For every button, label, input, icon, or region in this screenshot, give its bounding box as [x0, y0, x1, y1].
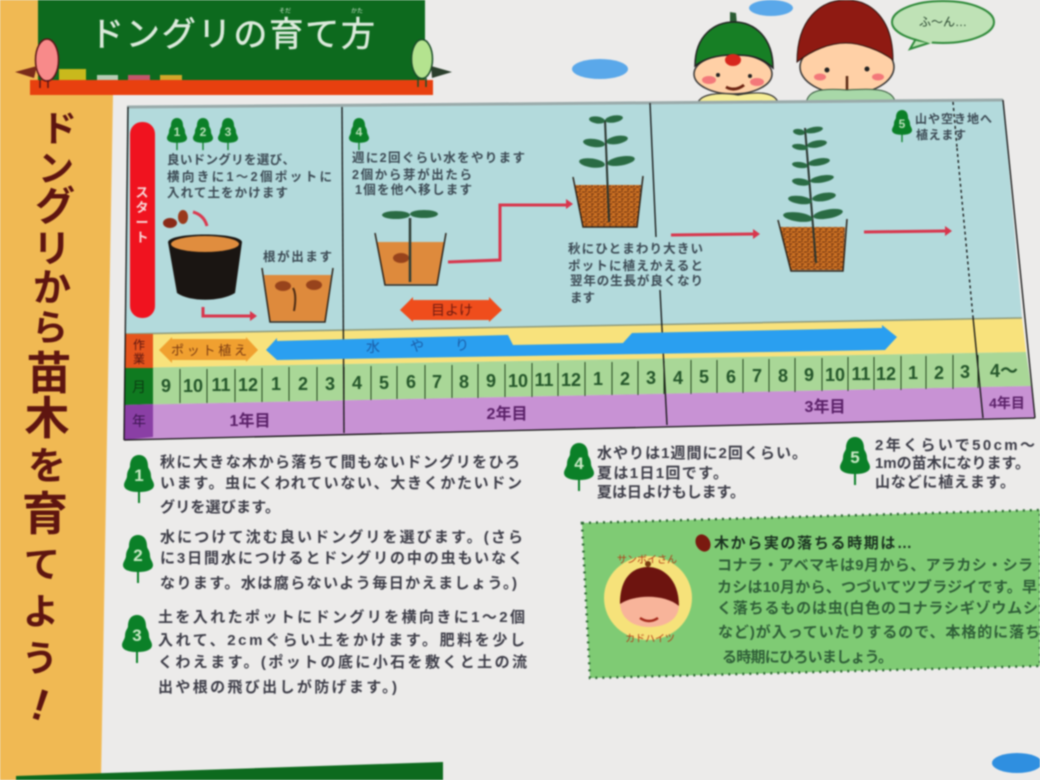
- year labels: 4年目: [989, 395, 1025, 411]
- explanation 5: 1mの苗木になります。: [875, 454, 1030, 472]
- explanation 4: [564, 443, 807, 501]
- vertical title: を: [28, 446, 66, 488]
- note text: カシは10月から、つづいてツブラジイです。早: [717, 578, 1037, 596]
- month numbers: 1: [593, 369, 603, 389]
- explanation 2: [123, 528, 523, 592]
- black pot: [168, 234, 242, 300]
- speech bubble: [892, 1, 994, 49]
- vertical title: リ: [33, 229, 71, 271]
- bullet acorn: [692, 532, 714, 554]
- vertical title: 苗: [26, 348, 72, 399]
- vertical title: ン: [38, 148, 74, 189]
- shade arrow: 目よけ: [431, 302, 473, 318]
- year labels: [230, 395, 1025, 430]
- explanation 1: 秋に大きな木から落ちて間もないドングリをひろ: [160, 453, 520, 471]
- month row: [125, 352, 1031, 405]
- month numbers: 11: [851, 364, 871, 384]
- pot planting arrow: ポット植え: [171, 343, 247, 358]
- month numbers: 2: [934, 363, 944, 383]
- year row: [124, 386, 1035, 440]
- month numbers: 1: [908, 363, 918, 383]
- month numbers: 8: [459, 372, 469, 392]
- work row: [125, 318, 1026, 368]
- pink bird: [15, 39, 58, 88]
- row label cells: 業: [133, 352, 145, 366]
- vertical title: て: [24, 544, 60, 585]
- green bird: [412, 40, 452, 87]
- explanation 5: 山などに植えます。: [875, 473, 1015, 491]
- step trees 1 2 3: 3: [225, 125, 232, 139]
- watering arrow: り: [455, 337, 469, 353]
- step 4 text: [352, 150, 525, 197]
- month numbers: 6: [406, 372, 416, 392]
- schedule chart panel: [124, 100, 1035, 440]
- step 1-3 text: 入れて土をかけます: [167, 185, 288, 200]
- month numbers: 3: [960, 362, 970, 382]
- explanation 2: なります。水は腐らないよう毎日かえましょう。): [160, 574, 517, 592]
- explanation 1: グリを選びます。: [160, 498, 280, 516]
- header blackboard: [15, 0, 452, 95]
- step tree 4: [349, 118, 369, 150]
- month numbers: 2: [298, 374, 308, 394]
- step trees 1 2 3: [167, 118, 238, 150]
- note text: [717, 557, 1040, 666]
- note heading: 木から実の落ちる時期は…: [714, 535, 912, 552]
- month numbers: 5: [379, 373, 389, 393]
- month numbers: 4〜: [990, 361, 1018, 381]
- start bar: ト: [135, 230, 149, 245]
- explanation 2: 水につけて沈む良いドングリを選びます。(さら: [160, 528, 523, 546]
- step 4 text: 1個を他へ移します: [355, 182, 472, 197]
- large tree pot: [778, 125, 847, 271]
- start bar: タ: [135, 200, 149, 215]
- left orange band: [0, 0, 113, 780]
- chalks: [59, 69, 182, 81]
- month numbers: 6: [726, 367, 736, 387]
- month numbers: 4: [352, 373, 362, 393]
- explanation 5: 2年くらいで50cm〜: [875, 436, 1035, 454]
- red acorn character: [797, 0, 896, 106]
- month numbers: 11: [211, 375, 231, 395]
- pot planting arrow: [159, 337, 258, 363]
- explanation 1: [124, 453, 522, 516]
- header title: ドングリの育て方: [90, 16, 375, 54]
- speech bubble: ふ〜ん…: [919, 15, 967, 29]
- note text: コナラ・アベマキは9月から、アラカシ・シラ: [717, 557, 1033, 574]
- step 4 text: 週に2回ぐらい水をやります: [352, 150, 525, 165]
- row label cells: 月: [132, 379, 146, 395]
- watering arrow: や: [410, 338, 424, 354]
- step 5 text: 山や空き地へ: [915, 111, 992, 126]
- month numbers: 2: [620, 369, 630, 389]
- month numbers: 12: [561, 370, 581, 390]
- pot with sprouting acorns: [262, 268, 333, 322]
- young tree pot: [573, 114, 643, 227]
- vertical title: ら: [32, 307, 68, 348]
- step 1-3 text: 良いドングリを選び、: [167, 152, 295, 167]
- year labels: 3年目: [805, 397, 845, 416]
- month numbers: 10: [183, 376, 203, 396]
- watering arrow: 水: [366, 339, 380, 355]
- chalk tray: [30, 80, 433, 95]
- acorns and curved arrow: [163, 210, 207, 228]
- clouds: [572, 0, 1040, 773]
- shade arrow: [400, 297, 502, 322]
- explanation 3: 入れて、2cmぐらい土をかけます。肥料を少し: [158, 631, 525, 649]
- explanation 4: 4: [574, 454, 584, 473]
- year labels: 1年目: [230, 411, 270, 430]
- row label cells: 年: [132, 413, 146, 429]
- vertical title: !: [26, 680, 55, 731]
- month numbers: 7: [432, 372, 442, 392]
- year divider lines: [124, 100, 1035, 440]
- month numbers: 7: [752, 366, 762, 386]
- watering arrow: [266, 325, 897, 360]
- month numbers: 12: [238, 375, 258, 395]
- arrow to pot 2: [203, 307, 250, 316]
- month numbers: [161, 361, 1018, 396]
- vertical title: 木: [24, 393, 70, 444]
- month numbers: 5: [699, 367, 709, 387]
- month numbers: 1: [271, 374, 281, 394]
- month numbers: 12: [876, 364, 896, 384]
- repot text: [568, 241, 703, 305]
- repot text: ポットに植えかえると: [568, 258, 703, 273]
- month separators: [180, 355, 978, 403]
- explanation 1: います。虫にくわれていない、大きくかたいドン: [160, 474, 522, 492]
- step 5 text: [915, 111, 992, 142]
- acorn mascot medallion: サンボイさん: [617, 554, 677, 566]
- elbow arrow: [448, 205, 566, 262]
- vertical title: う: [22, 638, 58, 679]
- explanation 5: [840, 436, 1035, 491]
- step tree 5: [892, 110, 912, 142]
- step trees 1 2 3: 1: [174, 125, 181, 139]
- seedling pot: [375, 210, 446, 285]
- explanation 4: 夏は日よけもします。: [597, 484, 745, 501]
- arrow to large pot: [671, 234, 753, 235]
- green acorn character: [694, 12, 779, 106]
- step 1-3 text: [167, 152, 332, 200]
- start bar: ス: [135, 185, 149, 200]
- vertical title: 育: [22, 488, 68, 540]
- month numbers: 3: [325, 374, 335, 394]
- step 5 text: 植えます: [916, 127, 966, 142]
- explanation 2: に3日間水につけるとドングリの中の虫もいなく: [160, 549, 523, 567]
- explanation 4: 水やりは1週間に2回くらい。: [597, 445, 807, 462]
- start bar: ー: [135, 215, 149, 230]
- explanation 4: 夏は1日1回です。: [597, 465, 728, 482]
- explanation 3: [122, 608, 527, 696]
- repot text: 秋にひとまわり大きい: [568, 241, 703, 256]
- month numbers: 4: [673, 368, 683, 388]
- month numbers: 8: [778, 366, 788, 386]
- step tree 5: 5: [899, 117, 906, 131]
- vertical title: か: [33, 268, 71, 310]
- acorn mascot medallion: [604, 554, 692, 645]
- step 1-3 text: 横向きに1〜2個ポットに: [167, 169, 332, 184]
- note text: る時期にひろいましょう。: [722, 649, 893, 666]
- vertical title: [22, 108, 77, 731]
- roots text: 根が出ます: [263, 249, 332, 264]
- arrow to planting site: [864, 231, 945, 232]
- month numbers: 10: [825, 365, 845, 385]
- explanation 2: 2: [133, 546, 143, 565]
- furigana: [279, 8, 363, 15]
- vertical title: グ: [35, 185, 75, 229]
- explanation 3: 3: [132, 626, 142, 645]
- explanation 3: 土を入れたポットにドングリを横向きに1〜2個: [158, 608, 525, 626]
- row label cells: 作: [133, 338, 145, 352]
- month numbers: 11: [534, 370, 554, 390]
- acorn mascot medallion: カドハイツ: [625, 633, 675, 645]
- repot text: ます: [570, 291, 595, 305]
- furigana: そだ: [279, 8, 291, 15]
- step tree 4: 4: [356, 125, 363, 139]
- note panel: [582, 510, 1040, 678]
- vertical title: ド: [41, 108, 77, 149]
- explanation 3: くわえます。(ポットの底に小石を敷くと土の流: [158, 653, 527, 671]
- row label cells: [124, 334, 153, 440]
- month numbers: 9: [161, 376, 171, 396]
- month numbers: 9: [486, 371, 496, 391]
- vertical title: よ: [23, 591, 59, 632]
- repot text: 翌年の生長が良くなり: [570, 273, 703, 288]
- month numbers: 10: [508, 371, 528, 391]
- step trees 1 2 3: 2: [200, 125, 207, 139]
- note text: く落ちるものは虫(白色のコナラシギゾウムシ: [717, 599, 1038, 617]
- furigana: かた: [351, 8, 363, 15]
- start bar: [130, 122, 155, 318]
- bottom green band: [16, 762, 443, 780]
- sky background: [125, 100, 1022, 335]
- month numbers: 3: [646, 368, 656, 388]
- note text: など)が入っていたりするので、本格的に落ち: [718, 623, 1040, 641]
- explanation 5: 5: [850, 448, 860, 467]
- year labels: 2年目: [487, 404, 527, 423]
- explanation 1: 1: [134, 466, 144, 485]
- explanation 3: 出や根の飛び出しが防げます。): [158, 678, 397, 696]
- month numbers: 9: [804, 365, 814, 385]
- step 4 text: 2個から芽が出たら: [352, 167, 472, 182]
